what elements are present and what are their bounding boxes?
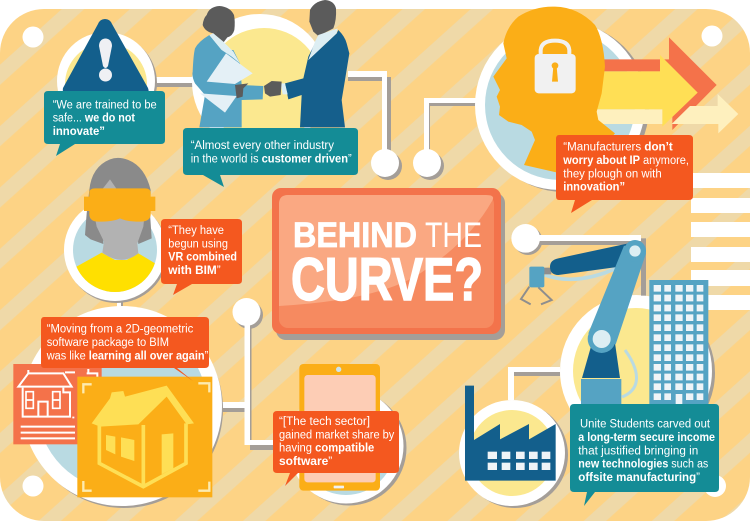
connector: factory to robot <box>508 367 560 400</box>
speech bubble: Unite Students <box>570 404 719 506</box>
icon: factory <box>465 386 556 481</box>
connector: VR to BIM <box>117 298 123 310</box>
speech bubble: customer driven: in the world is customer driven” <box>191 153 352 165</box>
speech bubble: IP: innovation” <box>563 182 625 194</box>
title plate <box>272 188 501 334</box>
woman <box>192 6 263 127</box>
speech bubble: VR with BIM: “They have <box>168 225 224 237</box>
BIM houses <box>13 364 212 497</box>
cable <box>545 267 620 279</box>
tablet ring <box>288 388 406 506</box>
base <box>581 379 621 411</box>
2D plan <box>13 364 102 444</box>
speech bubble: compatible software: having compatible <box>279 443 374 455</box>
title text: CURVE? <box>291 246 483 313</box>
corner dot bottom left <box>22 476 44 496</box>
speech bubble: VR with BIM: VR combined <box>168 252 237 264</box>
speech bubble: VR with BIM: with BIM” <box>167 265 221 277</box>
BIM ring <box>22 306 223 508</box>
speech bubble: VR with BIM: begun using <box>168 238 228 250</box>
speech bubble: trained to be safe <box>44 91 165 156</box>
connector: warning to handshake <box>155 77 195 87</box>
speech bubble: learning all over again <box>41 317 209 381</box>
factory ring <box>459 400 568 508</box>
speech bubble: IP: “Manufacturers don’t <box>563 142 673 154</box>
speech bubble: compatible software: “[The tech sector] <box>279 416 370 428</box>
icon: apartment building <box>649 280 708 411</box>
speech bubble: Unite Students: offsite manufacturing” <box>578 472 700 484</box>
joint housings <box>588 240 646 353</box>
head with lock <box>493 7 615 177</box>
corner dot top left <box>22 26 44 48</box>
title text: BEHIND <box>293 216 417 255</box>
speech bubble: trained to be safe: innovate” <box>53 126 105 138</box>
speech bubble: compatible software <box>273 411 399 486</box>
speech bubble: Unite Students: new technologies such as <box>578 459 709 471</box>
speech bubble: IP: they plough on with <box>563 168 662 180</box>
people shaking hands <box>192 0 349 127</box>
speech bubble: customer driven <box>183 128 358 187</box>
joints <box>593 245 641 348</box>
robot arm <box>511 224 646 411</box>
title text: THE <box>425 216 482 255</box>
arrows <box>595 37 738 133</box>
speech bubble: trained to be safe: safe... we do not <box>53 113 135 125</box>
speech bubble: Unite Students: that justified bringing in <box>578 445 698 457</box>
speech bubble: Unite Students: Unite Students carved out <box>580 419 711 431</box>
title inner plate <box>279 195 494 328</box>
claw <box>521 267 552 304</box>
handshake panel <box>183 0 358 187</box>
speech bubble: learning all over again: was like learning all over again” <box>46 350 208 362</box>
warning panel <box>44 19 165 156</box>
icon: warning triangle <box>63 19 149 94</box>
dot behind bubble <box>704 475 726 497</box>
title text <box>291 216 483 313</box>
arm connector <box>511 224 646 296</box>
robot ring <box>560 295 715 449</box>
lower dark arm <box>582 343 620 378</box>
title shadow <box>276 193 505 340</box>
man <box>281 0 349 127</box>
speech bubble: IP: worry about IP anymore, <box>562 155 689 167</box>
woman with VR headset <box>64 158 168 303</box>
forearm <box>588 246 646 344</box>
head ring <box>475 20 649 192</box>
speech bubble: learning all over again: software package to BIM <box>47 337 169 349</box>
handshake ring <box>192 14 328 150</box>
VR panel <box>64 158 242 310</box>
speech bubble: Unite Students: a long-term secure income <box>578 432 715 444</box>
3D model <box>77 377 212 497</box>
robot panel <box>511 224 726 506</box>
title gloss <box>279 195 493 306</box>
lock head panel <box>475 7 738 213</box>
speech bubble: customer driven: “Almost every other industry <box>191 140 334 152</box>
BIM panel <box>13 306 223 508</box>
factory panel <box>459 386 568 508</box>
warning ring <box>57 32 157 132</box>
handshake <box>264 81 282 97</box>
corner dot top right <box>702 26 722 46</box>
connector: BIM to tablet <box>220 298 276 450</box>
speech bubble: learning all over again: “Moving from a 2D-geometric <box>47 324 194 336</box>
speech bubble: VR with BIM <box>161 219 242 295</box>
speech bubble: trained to be safe: “We are trained to be <box>53 99 157 111</box>
tablet panel <box>273 364 406 506</box>
white bars right <box>691 173 750 310</box>
speech bubble: compatible software: software” <box>279 456 332 468</box>
speech bubble: IP <box>556 135 693 213</box>
speech bubble: compatible software: gained market share by <box>279 429 395 441</box>
connector: handshake to node <box>348 71 402 180</box>
title panel <box>272 188 505 340</box>
upper arm <box>550 243 643 275</box>
connector: node to head <box>413 98 476 180</box>
icon: tablet <box>299 364 380 491</box>
